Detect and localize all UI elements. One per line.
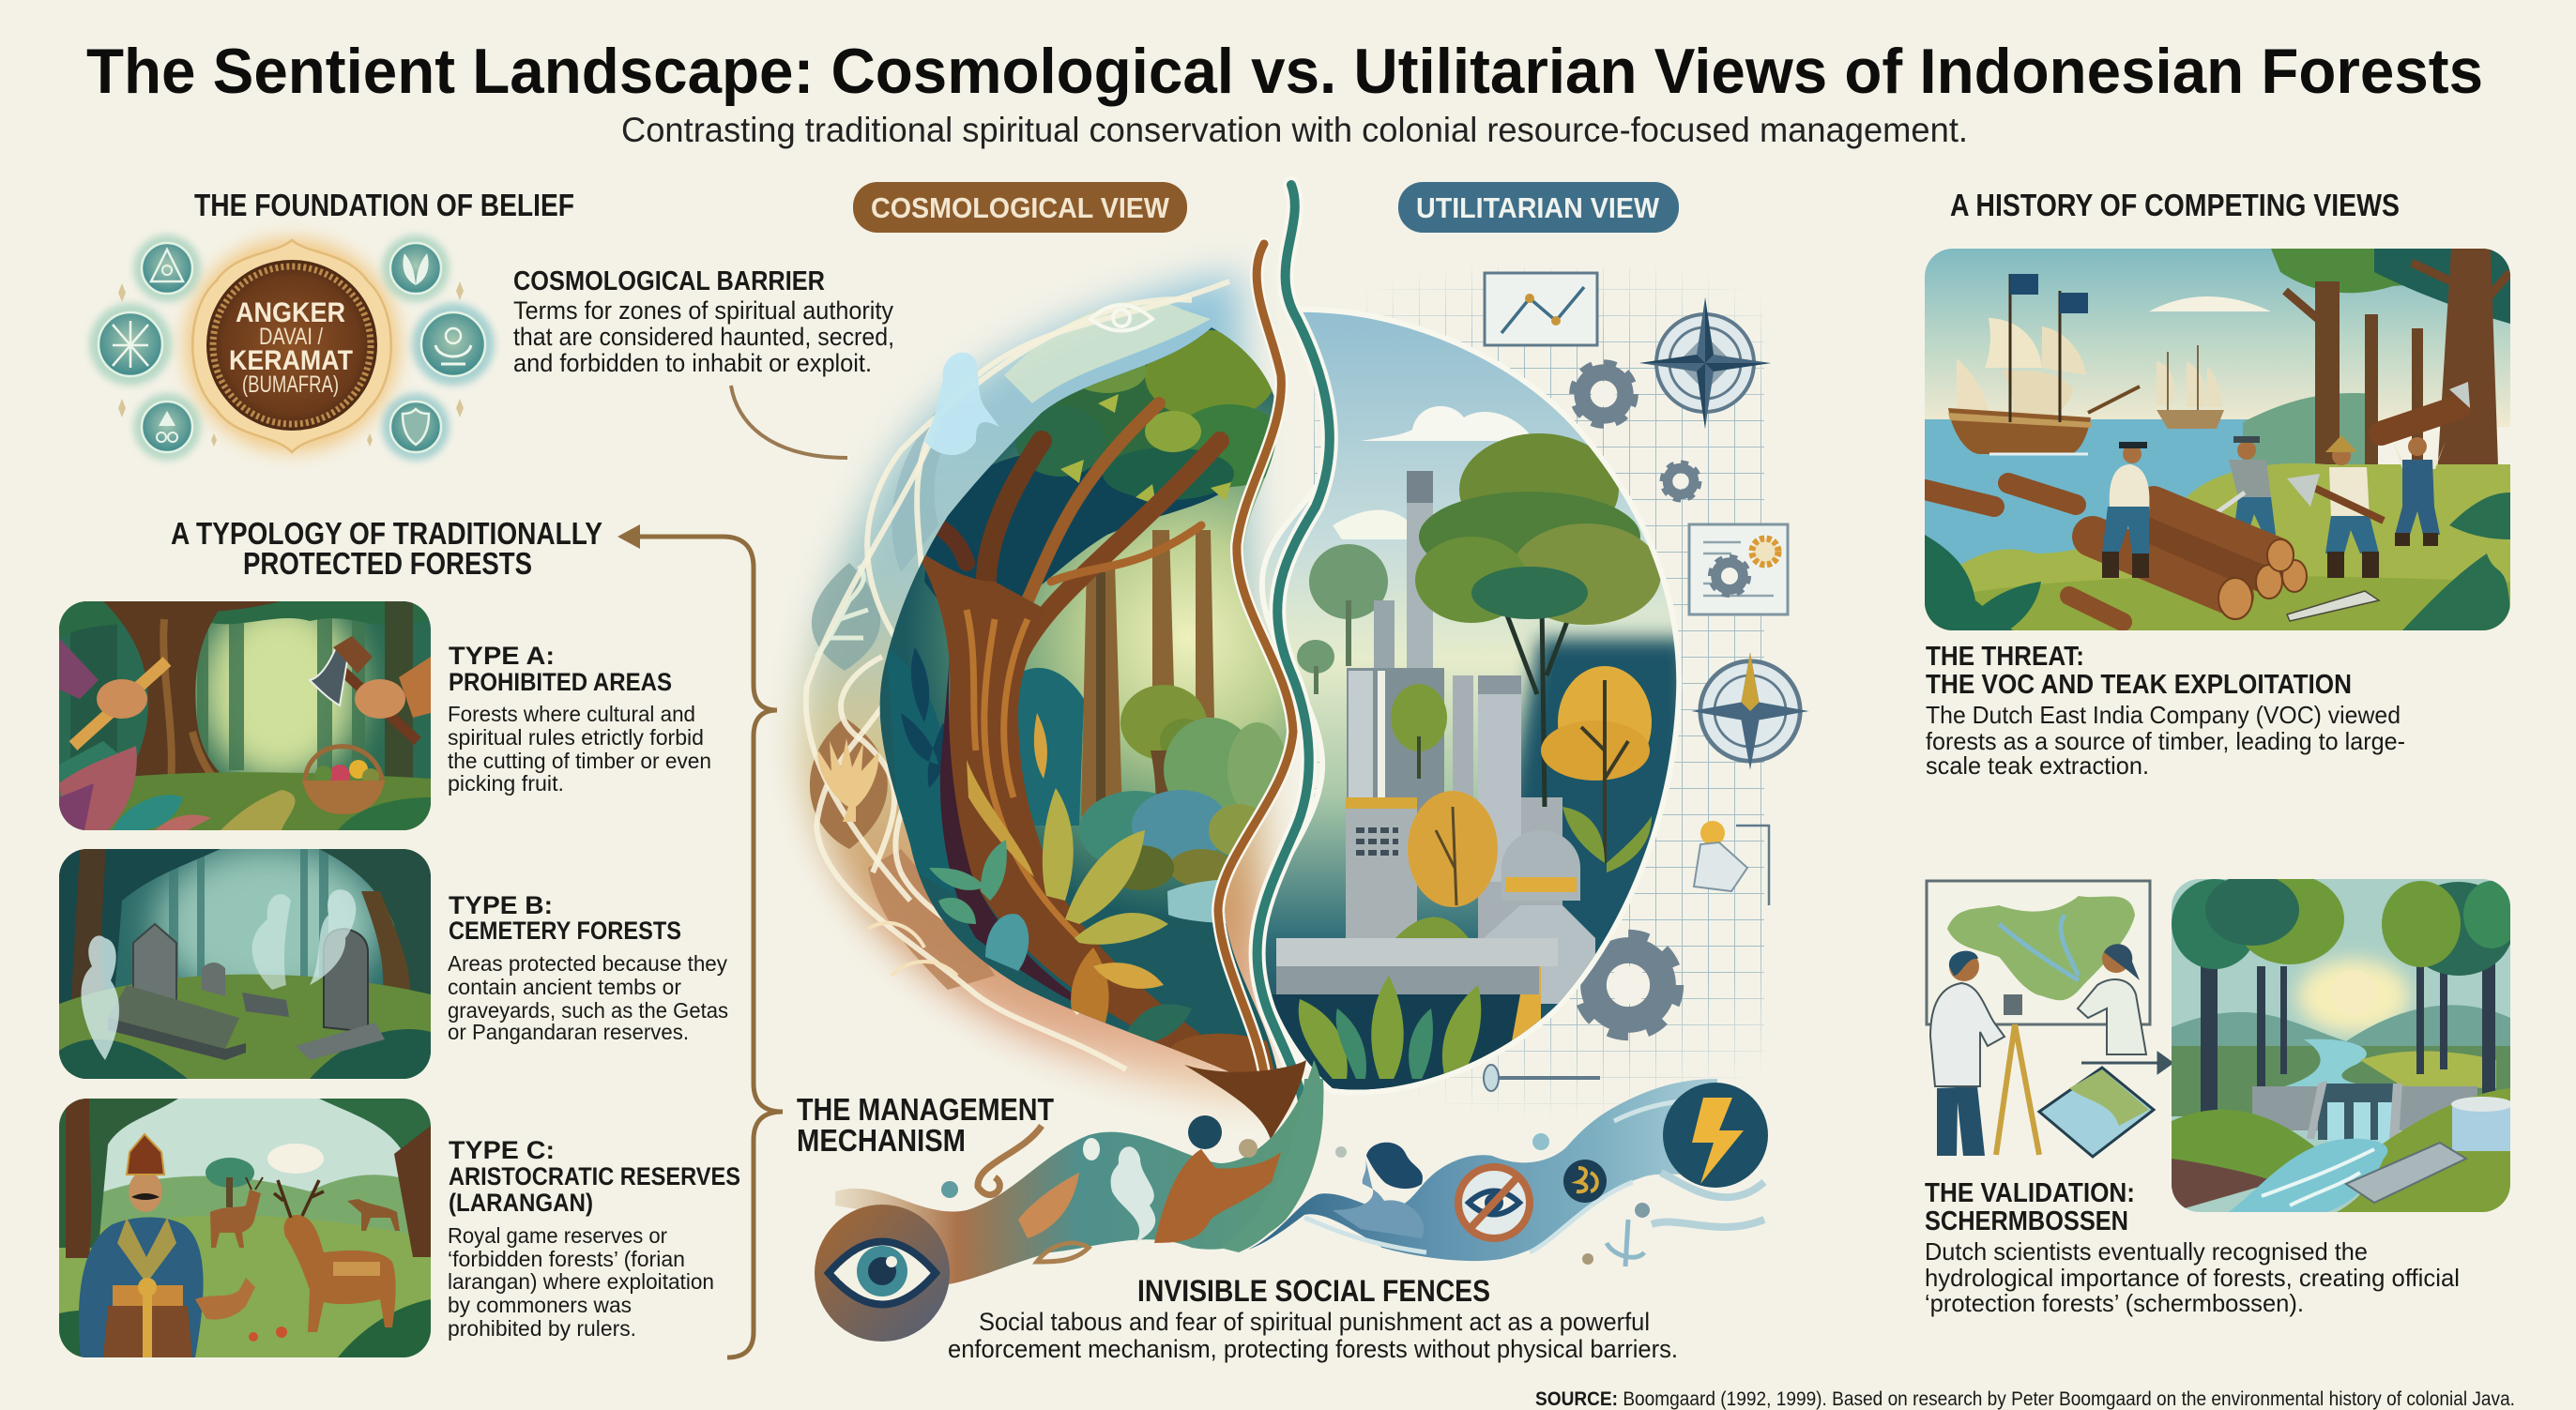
gear 1 — [1576, 366, 1632, 422]
spirit eye — [1090, 305, 1152, 330]
text: the validation: hydrological importance of forests, creating official — [1925, 1264, 2460, 1292]
symbol: knot glyph — [868, 923, 957, 976]
document card — [1689, 524, 1788, 614]
central medallion: (BUMAFRA) — [242, 371, 339, 398]
heading: foundation of belief: THE FOUNDATION OF BELIEF — [194, 188, 574, 222]
text: type C: prohibited by rulers. — [448, 1316, 636, 1341]
central medallion: ANGKER — [236, 297, 345, 328]
text: the threat: The Dutch East India Company (VOC) viewed — [1926, 701, 2401, 729]
deer back right — [347, 1199, 400, 1231]
text: invisible social fences: enforcement mechanism, protecting forests without physical barriers. — [948, 1335, 1678, 1363]
text: type A: Forests where cultural and — [448, 702, 695, 726]
title: The Sentient Landscape: Cosmological vs. Utilitarian Views of Indonesian Forests — [86, 36, 2483, 107]
olive mound — [1395, 917, 1469, 938]
text: the validation — [1925, 1178, 2460, 1317]
text: the validation: ‘protection forests’ (schermbossen). — [1925, 1289, 2304, 1317]
text: type C: larangan) where exploitation — [448, 1269, 714, 1294]
green strand — [1220, 1079, 1323, 1252]
ghost — [924, 353, 999, 455]
central medallion: DAVAI / — [259, 324, 323, 350]
panel: spiritual ribbons glow — [802, 272, 1267, 1107]
platform — [1276, 938, 1558, 966]
branches — [924, 403, 1220, 657]
text: type C: ‘forbidden forests’ (forian — [448, 1247, 685, 1271]
text: type B — [448, 891, 728, 1044]
symbol: plant glyph — [816, 566, 868, 657]
dome — [1473, 830, 1595, 1004]
text: type B: TYPE B: — [449, 891, 553, 919]
river — [2229, 1139, 2387, 1212]
dark teal right side — [1517, 622, 1676, 1037]
image: cemetery forest — [59, 844, 431, 1079]
callout: cosmological barrier: Terms for zones of spiritual authority — [513, 296, 893, 325]
small sparkles — [118, 281, 464, 447]
lower plants — [1043, 788, 1168, 945]
image: protection forest and dam — [2172, 874, 2520, 1212]
central medallion: KERAMAT — [229, 345, 353, 376]
text: invisible social fences — [948, 1274, 1678, 1363]
text: type A: PROHIBITED AREAS — [449, 668, 672, 696]
slider — [1484, 1065, 1600, 1091]
right wave — [1248, 1079, 1717, 1261]
text: the validation: SCHERMBOSSEN — [1925, 1206, 2128, 1236]
worker 3 — [2287, 435, 2384, 578]
small eye — [1037, 1243, 1089, 1262]
log pile — [2069, 502, 2279, 622]
hand saw — [2287, 591, 2379, 621]
dam — [2252, 1081, 2477, 1149]
callout: cosmological barrier: and forbidden to inhabit or exploit. — [513, 349, 872, 377]
text: invisible social fences: INVISIBLE SOCIAL FENCES — [1137, 1274, 1490, 1308]
callout: cosmological barrier — [513, 266, 894, 377]
heading: management mechanism: MECHANISM — [797, 1123, 966, 1158]
person icon — [1694, 821, 1769, 905]
diagram: foundation medallion with symbols — [89, 235, 495, 461]
panel: cosmological forest illustration — [880, 327, 1287, 1072]
symbol badge: lotus — [382, 235, 450, 302]
yellow tree — [1541, 666, 1652, 872]
text: type A — [448, 642, 711, 796]
text: type C: Royal game reserves or — [448, 1223, 667, 1248]
worker 1 — [2102, 442, 2149, 578]
pill: cosmological view — [853, 182, 1187, 233]
pill: utilitarian view: UTILITARIAN VIEW — [1416, 191, 1660, 224]
right bank — [2337, 1088, 2510, 1212]
symbol badge: crossed spears — [89, 303, 172, 386]
concrete tank — [2451, 1097, 2513, 1151]
log ends — [2218, 539, 2307, 619]
foreground dark teal ground and plants — [1258, 994, 1520, 1098]
left teal foliage — [888, 649, 956, 895]
pill: utilitarian view — [1398, 182, 1679, 233]
orange leaf bush — [1408, 791, 1498, 907]
text: type A: TYPE A: — [449, 642, 555, 670]
heading: history of competing views: A HISTORY OF COMPETING VIEWS — [1950, 188, 2400, 222]
text: type A: picking fruit. — [448, 771, 564, 796]
protection forest trees — [2201, 929, 2495, 1135]
panel: utilitarian grid and instruments — [1314, 267, 1809, 1116]
symbol badge: spiral — [412, 303, 495, 386]
image: prohibited areas forest — [59, 596, 431, 830]
text: the validation: Dutch scientists eventually recognised the — [1925, 1237, 2368, 1266]
cloud — [1361, 406, 1534, 441]
floating logs — [1925, 483, 2076, 507]
orange scroll — [1018, 1173, 1079, 1238]
subtitle: Contrasting traditional spiritual conservation with colonial resource-focused management. — [621, 111, 1968, 149]
source note: SOURCE: Boomgaard (1992, 1999). Based on research by Peter Boomgaard on the environmental history of colonial Java. — [1535, 1388, 2515, 1410]
connector curve: barrier to forest — [731, 386, 847, 458]
compass 1 — [1639, 297, 1771, 429]
heading: management mechanism — [797, 1092, 1054, 1158]
callout: cosmological barrier: COSMOLOGICAL BARRIER — [513, 266, 825, 296]
text: type A: the cutting of timber or even — [448, 749, 711, 773]
text: type B: graveyards, such as the Getas — [448, 998, 728, 1023]
chart card — [1485, 273, 1597, 345]
small charm — [1563, 1160, 1607, 1203]
background tree trunks — [1081, 530, 1214, 816]
text: the threat: THE THREAT: — [1926, 642, 2084, 672]
figure: person — [1154, 1115, 1281, 1243]
big tree — [1415, 433, 1661, 807]
text: type C: TYPE C: — [449, 1136, 555, 1164]
gear large — [1583, 940, 1673, 1030]
no-eye symbol — [1458, 1167, 1530, 1238]
arrow — [2081, 1054, 2172, 1072]
gear 2 — [1664, 464, 1698, 498]
center blocks — [1453, 675, 1562, 938]
eye disc — [815, 1205, 950, 1342]
text: the validation: THE VALIDATION: — [1925, 1178, 2135, 1208]
image: VOC teak exploitation — [1925, 249, 2510, 630]
ship 2 — [2157, 345, 2224, 429]
left bank — [2172, 1110, 2318, 1201]
image: aristocratic reserve — [59, 1099, 431, 1357]
illustration: flow of social fences — [815, 1060, 1768, 1342]
symbol badge: shield — [382, 393, 450, 461]
text: the threat: THE VOC AND TEAK EXPLOITATION — [1926, 670, 2352, 700]
yellow panel — [1511, 957, 1541, 1046]
small decorative drops — [1239, 1133, 1650, 1265]
text: type A: spiritual rules etrictly forbid — [448, 725, 704, 750]
sky trees — [2271, 249, 2510, 310]
compass 2 — [1691, 652, 1809, 770]
callout: cosmological barrier: that are considered haunted, secred, — [513, 323, 894, 351]
symbol badge: knot — [133, 393, 201, 461]
text: the threat — [1926, 642, 2405, 780]
pill: cosmological view: COSMOLOGICAL VIEW — [871, 191, 1170, 224]
swirl — [978, 1126, 1042, 1195]
distant trees — [1297, 544, 1388, 674]
heading: typology — [171, 516, 602, 581]
midground foliage — [1120, 685, 1207, 760]
small tree — [1391, 684, 1447, 751]
text: invisible social fences: Social tabous and fear of spiritual punishment act as a powerful — [979, 1308, 1650, 1336]
central medallion — [185, 238, 399, 452]
small deer — [195, 1278, 255, 1320]
scientist woman — [2078, 944, 2146, 1054]
foliage corners — [1925, 493, 2510, 630]
hand symbol — [817, 738, 878, 822]
trident glyph — [1607, 1220, 1644, 1266]
left wave — [835, 1060, 1323, 1285]
text: the threat: scale teak extraction. — [1926, 751, 2149, 780]
factory block left — [1347, 668, 1444, 813]
sluice — [2346, 1143, 2466, 1203]
dark teal under-canopy — [924, 456, 1231, 598]
arrow and bracket: typology — [617, 524, 783, 1357]
chimney — [1407, 503, 1433, 668]
heading: typology: A TYPOLOGY OF TRADITIONALLY — [171, 516, 602, 551]
heading: management mechanism: THE MANAGEMENT — [797, 1092, 1054, 1127]
illustration: scientists with map — [1927, 881, 2172, 1157]
symbol badge: triangle — [133, 235, 201, 302]
text: the threat: forests as a source of timber, leading to large- — [1926, 727, 2405, 755]
ship 1 — [1948, 274, 2140, 454]
worker 2 behind pile — [2205, 436, 2276, 535]
text: type B: or Pangandaran reserves. — [448, 1020, 689, 1044]
ribbons — [806, 281, 1229, 1069]
figure: ghost — [1083, 1138, 1155, 1243]
text: type B: contain ancient tembs or — [448, 975, 681, 999]
divider strands: cosmological and utilitarian — [1218, 185, 1330, 1163]
text: type C: ARISTOCRATIC RESERVES — [449, 1162, 740, 1190]
worker 4 with raised log — [2381, 382, 2470, 546]
brown root swoosh — [1184, 1060, 1306, 1140]
woven ribbon pockets — [810, 300, 1211, 990]
map board — [1927, 881, 2150, 1024]
small map — [2039, 1068, 2154, 1157]
text: type C: by commoners was — [448, 1293, 632, 1317]
lightning disc — [1663, 1083, 1768, 1188]
heading: typology: PROTECTED FORESTS — [243, 546, 532, 581]
deer back left — [210, 1177, 263, 1248]
text: type B: Areas protected because they — [448, 951, 727, 976]
figure: woman — [1333, 1143, 1424, 1238]
text: type C: (LARANGAN) — [449, 1189, 593, 1217]
canopy — [1015, 330, 1286, 505]
scientist man — [1930, 951, 2004, 1156]
main trunk — [922, 555, 1229, 1071]
main deer — [274, 1180, 396, 1332]
text: type C — [448, 1136, 740, 1341]
wave highlights — [1304, 1100, 1717, 1252]
noble figure — [79, 1218, 204, 1357]
panel: utilitarian landscape illustration — [1248, 300, 1689, 1098]
text: type B: CEMETERY FORESTS — [449, 917, 681, 945]
ground — [1925, 463, 2510, 630]
surveying tripod — [1996, 994, 2039, 1155]
